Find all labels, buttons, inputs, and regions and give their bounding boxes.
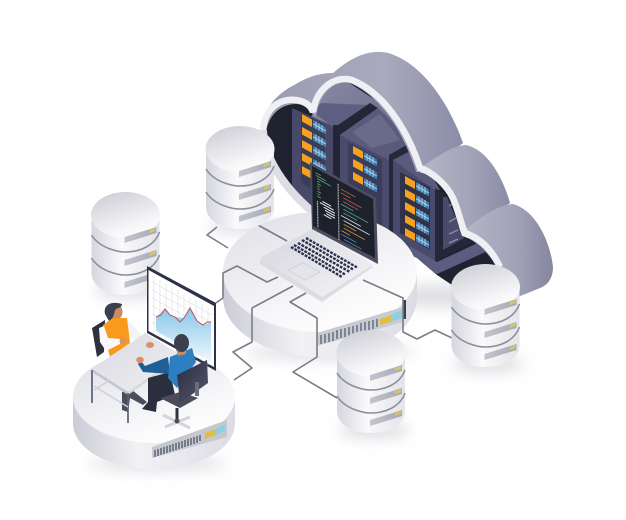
soft ground shadows: [88, 218, 524, 471]
laptop screen: [310, 162, 378, 264]
illustration: isometric cloud server network: [73, 52, 553, 476]
chair back: [177, 360, 208, 403]
cloud lobe: middle: [420, 145, 510, 234]
chart grid: [152, 277, 212, 365]
rack plinth: [410, 244, 486, 274]
cloud lobe: right: [462, 204, 553, 297]
cloud: white rim: [263, 79, 500, 267]
person in blue with chair: [136, 334, 208, 428]
left platform vent panel: [152, 420, 227, 458]
database: lower centre: [336, 330, 406, 433]
neck: [176, 347, 186, 356]
laptop trackpad: [288, 263, 320, 280]
chair arm: [195, 382, 199, 396]
far hand: [146, 342, 154, 348]
cloud with servers: [255, 52, 553, 310]
far hand on table: [146, 342, 154, 348]
laptop keyboard: [291, 238, 358, 277]
arm in white shirt: [99, 326, 120, 351]
rack gap: [333, 103, 378, 142]
chair seat: [160, 392, 198, 408]
cloud interior and server racks: [266, 82, 496, 284]
platform vent panel: [317, 300, 406, 346]
connection lines: [207, 225, 452, 398]
laptop screen code: [316, 172, 370, 258]
cloud: extruded back: [262, 52, 463, 200]
laptop: [260, 162, 378, 302]
database: upper middle: [206, 126, 274, 229]
database: right: [451, 264, 520, 367]
seated legs under table: [122, 390, 147, 412]
orange vest: [103, 318, 130, 357]
rack gap 2: [389, 146, 410, 232]
cloud: lower left rim: [263, 130, 320, 218]
blue shirt: [168, 348, 196, 388]
person in orange with chair: [92, 303, 154, 357]
table: [92, 333, 181, 423]
arm: [138, 357, 170, 374]
chair base: [163, 408, 190, 428]
central platform: [223, 212, 417, 357]
cloud ceiling: [312, 82, 425, 174]
head: [105, 303, 122, 321]
server rack 2: [340, 135, 389, 230]
rack lights: [302, 114, 326, 134]
hand: [136, 357, 144, 363]
analytics chart board: [147, 266, 216, 371]
head: [174, 334, 189, 352]
chair back: [92, 320, 105, 357]
database: left: [91, 192, 160, 295]
left platform: [73, 351, 235, 469]
server rack 1: [292, 108, 333, 206]
far arm: [124, 318, 150, 348]
laptop base: [260, 231, 373, 302]
hand: [120, 338, 126, 344]
legs: [142, 372, 175, 412]
chart area and line: [156, 308, 211, 362]
server rack 3: [393, 160, 435, 262]
